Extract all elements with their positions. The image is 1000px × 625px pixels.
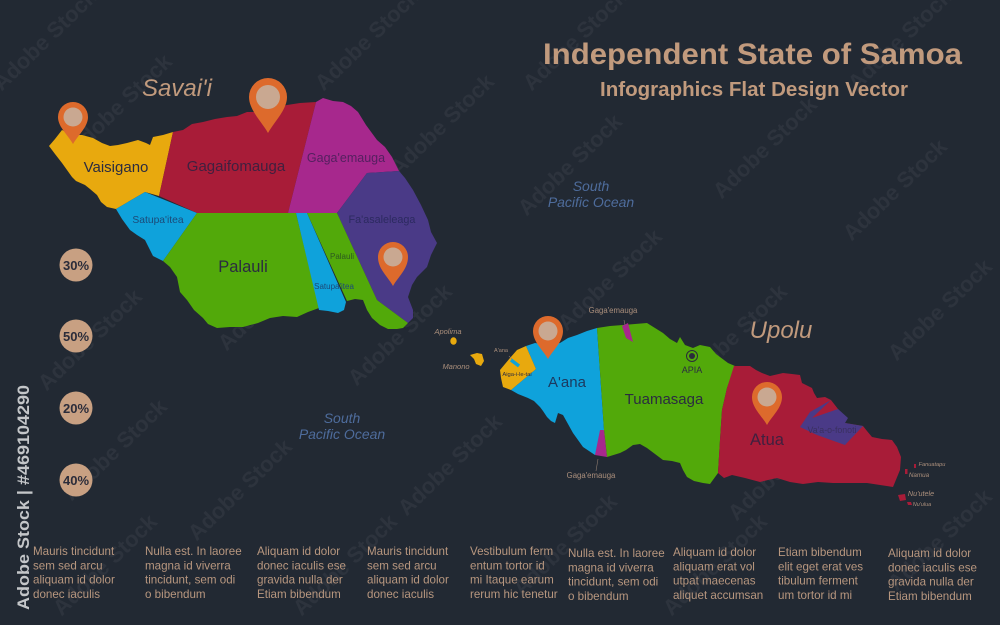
text block 7: aliquet accumsan bbox=[673, 589, 763, 602]
text block 6: magna id viverra bbox=[568, 561, 654, 574]
text block 4: donec iaculis bbox=[367, 588, 434, 601]
text block 3: donec iaculis ese bbox=[257, 559, 346, 572]
islands: Apolima and Manono bbox=[450, 337, 484, 366]
text block 3: Aliquam id dolor bbox=[257, 545, 340, 558]
region: Gaga'emauga bbox=[288, 98, 399, 213]
pin: A'ana bbox=[533, 316, 563, 359]
text block 7: aliquam erat vol bbox=[673, 560, 755, 573]
region: Gaga'emauga: Gaga'emauga bbox=[307, 151, 385, 165]
small place labels: Nu'utele bbox=[908, 489, 934, 498]
text block 5: mi Itaque earum bbox=[470, 574, 554, 587]
region: Palauli: Palauli bbox=[218, 258, 268, 276]
small place labels: Namua bbox=[909, 472, 930, 479]
small place labels: Nu'ulua bbox=[913, 502, 931, 508]
text block 6: o bibendum bbox=[568, 590, 629, 603]
text: Adobe Stock bbox=[213, 243, 327, 355]
heading: Upolu: Upolu bbox=[750, 317, 812, 344]
pin: Atua bbox=[752, 382, 782, 425]
marker: Apia capital bbox=[682, 350, 702, 375]
small place labels: Gaga'emauga bbox=[567, 471, 616, 480]
percentage badge 20%: 20% bbox=[63, 401, 89, 416]
text block 5: entum tortor id bbox=[470, 559, 545, 572]
text block 2: Nulla est. In laoree bbox=[145, 545, 242, 558]
heading: Savai'i: Savai'i bbox=[142, 75, 213, 102]
pin: Vaisigano bbox=[58, 102, 88, 144]
text block 6: Nulla est. In laoree bbox=[568, 547, 665, 560]
stock credit vertical text: Adobe Stock | #469104290 bbox=[14, 385, 33, 610]
region: Atua: Atua bbox=[750, 431, 785, 449]
region: Palauli east: Palauli bbox=[330, 252, 354, 261]
text: Adobe Stock bbox=[343, 278, 457, 390]
region: Va'a-o-fonoti: Va'a-o-fonoti bbox=[808, 425, 857, 435]
region: Gagaifomauga bbox=[159, 102, 316, 213]
small place labels bbox=[433, 306, 945, 508]
text block 4: aliquam id dolor bbox=[367, 574, 449, 587]
region: Gagaifomauga: Gagaifomauga bbox=[187, 158, 286, 175]
percentage badge 30% bbox=[60, 248, 92, 282]
map: Savai'i island bbox=[49, 98, 437, 329]
title: Independent State of Samoa bbox=[543, 38, 962, 71]
text: Adobe Stock bbox=[678, 278, 792, 390]
text block 1: aliquam id dolor bbox=[33, 574, 115, 587]
region: Tuamasaga: Tuamasaga bbox=[625, 391, 704, 408]
text block 1: donec iaculis bbox=[33, 588, 100, 601]
region: Palauli east bbox=[307, 213, 408, 329]
text block 8: Etiam bibendum bbox=[778, 546, 862, 559]
text: Adobe Stock bbox=[838, 133, 952, 245]
percentage badge 40%: 40% bbox=[63, 473, 89, 488]
text block 1: Mauris tincidunt bbox=[33, 545, 115, 558]
region: A'ana bbox=[511, 328, 604, 455]
text block 9: donec iaculis ese bbox=[888, 561, 977, 574]
ocean label: south: South bbox=[324, 410, 361, 426]
ocean label: north: South bbox=[573, 178, 610, 194]
islands: Aleipata group bbox=[898, 464, 916, 505]
region: Tuamasaga bbox=[597, 323, 735, 484]
text: Adobe Stock bbox=[883, 253, 997, 365]
text block 5: Vestibulum ferm bbox=[470, 545, 553, 558]
small place labels: Manono bbox=[442, 362, 470, 371]
region: Aiga-i-le-tai bbox=[500, 346, 536, 390]
text block 7: Aliquam id dolor bbox=[673, 546, 756, 559]
marker: Apia capital: APIA bbox=[682, 365, 702, 375]
text: Adobe Stock bbox=[63, 48, 177, 160]
small place labels: Gaga'emauga bbox=[589, 306, 638, 315]
small place labels: Apolima bbox=[433, 327, 462, 336]
region: Satupa'itea west: Satupa'itea bbox=[132, 215, 184, 226]
pin: Fa'asaleleaga bbox=[378, 242, 408, 286]
percentage badge 50%: 50% bbox=[63, 329, 89, 344]
region: Gaga'emauga north bbox=[622, 323, 633, 342]
text block 6: tincidunt, sem odi bbox=[568, 576, 658, 589]
text block 4: Mauris tincidunt bbox=[367, 545, 449, 558]
region: Va'a-o-fonoti bbox=[800, 400, 863, 445]
text: Adobe Stock bbox=[553, 223, 667, 335]
text block 7: utpat maecenas bbox=[673, 575, 756, 588]
text block 2: tincidunt, sem odi bbox=[145, 574, 235, 587]
region: Satupa'itea east bbox=[296, 213, 346, 313]
text: Adobe Stock bbox=[33, 283, 147, 395]
region: Palauli bbox=[163, 213, 319, 328]
region: A'ana: A'ana bbox=[548, 374, 587, 391]
text block 8: elit eget erat ves bbox=[778, 560, 863, 573]
text block 1: sem sed arcu bbox=[33, 559, 103, 572]
text: Adobe Stock bbox=[183, 433, 297, 545]
region: Vaisigano: Vaisigano bbox=[84, 159, 148, 176]
region: Fa'asaleleaga bbox=[337, 171, 437, 323]
text block 5: rerum hic tenetur bbox=[470, 588, 558, 601]
text: Adobe Stock bbox=[708, 91, 822, 203]
region: Satupa'itea west bbox=[116, 192, 197, 261]
text block 4: sem sed arcu bbox=[367, 559, 437, 572]
subtitle: Infographics Flat Design Vector bbox=[600, 78, 908, 101]
ocean label: south: Pacific Ocean bbox=[299, 426, 385, 442]
text: Adobe Stock bbox=[508, 488, 622, 600]
pin: Gagaifomauga bbox=[249, 78, 287, 133]
text block 9: Aliquam id dolor bbox=[888, 547, 971, 560]
text block 8: um tortor id mi bbox=[778, 589, 852, 602]
region: Fa'asaleleaga: Fa'asaleleaga bbox=[349, 214, 415, 226]
text block 2: o bibendum bbox=[145, 588, 206, 601]
text: Adobe Stock bbox=[48, 508, 162, 620]
percentage badge 20% bbox=[60, 392, 92, 424]
text block 3: gravida nulla der bbox=[257, 574, 343, 587]
map: Upolu island bbox=[500, 323, 901, 487]
text: Adobe Stock bbox=[288, 508, 402, 620]
text: Adobe Stock bbox=[385, 68, 499, 180]
text: Adobe Stock bbox=[883, 483, 997, 595]
text: Adobe Stock bbox=[513, 108, 627, 220]
region: Gaga'emauga south bbox=[595, 430, 607, 457]
percentage badge 30%: 30% bbox=[63, 258, 89, 273]
text block 9: Etiam bibendum bbox=[888, 590, 972, 603]
region: Aiga-i-le-tai: Aiga-i-le-tai bbox=[502, 372, 532, 378]
ocean label: north: Pacific Ocean bbox=[548, 194, 634, 210]
text block 2: magna id viverra bbox=[145, 559, 231, 572]
percentage badge 40% bbox=[60, 464, 92, 496]
region: Vaisigano bbox=[49, 130, 173, 209]
text block 8: tibulum ferment bbox=[778, 575, 859, 588]
text: Adobe Stock bbox=[58, 393, 172, 505]
label: Satupa'itea east: Satupa'itea bbox=[314, 282, 354, 291]
text: Adobe Stock bbox=[723, 413, 837, 525]
region: Atua bbox=[718, 366, 901, 487]
text block 9: gravida nulla der bbox=[888, 576, 974, 589]
text: Adobe Stock bbox=[393, 408, 507, 520]
small place labels: A'ana bbox=[494, 348, 509, 354]
small place labels: Fanuatapu bbox=[919, 462, 945, 468]
text block 3: Etiam bibendum bbox=[257, 588, 341, 601]
percentage badge 50% bbox=[60, 320, 92, 352]
text: Adobe Stock bbox=[658, 508, 772, 620]
